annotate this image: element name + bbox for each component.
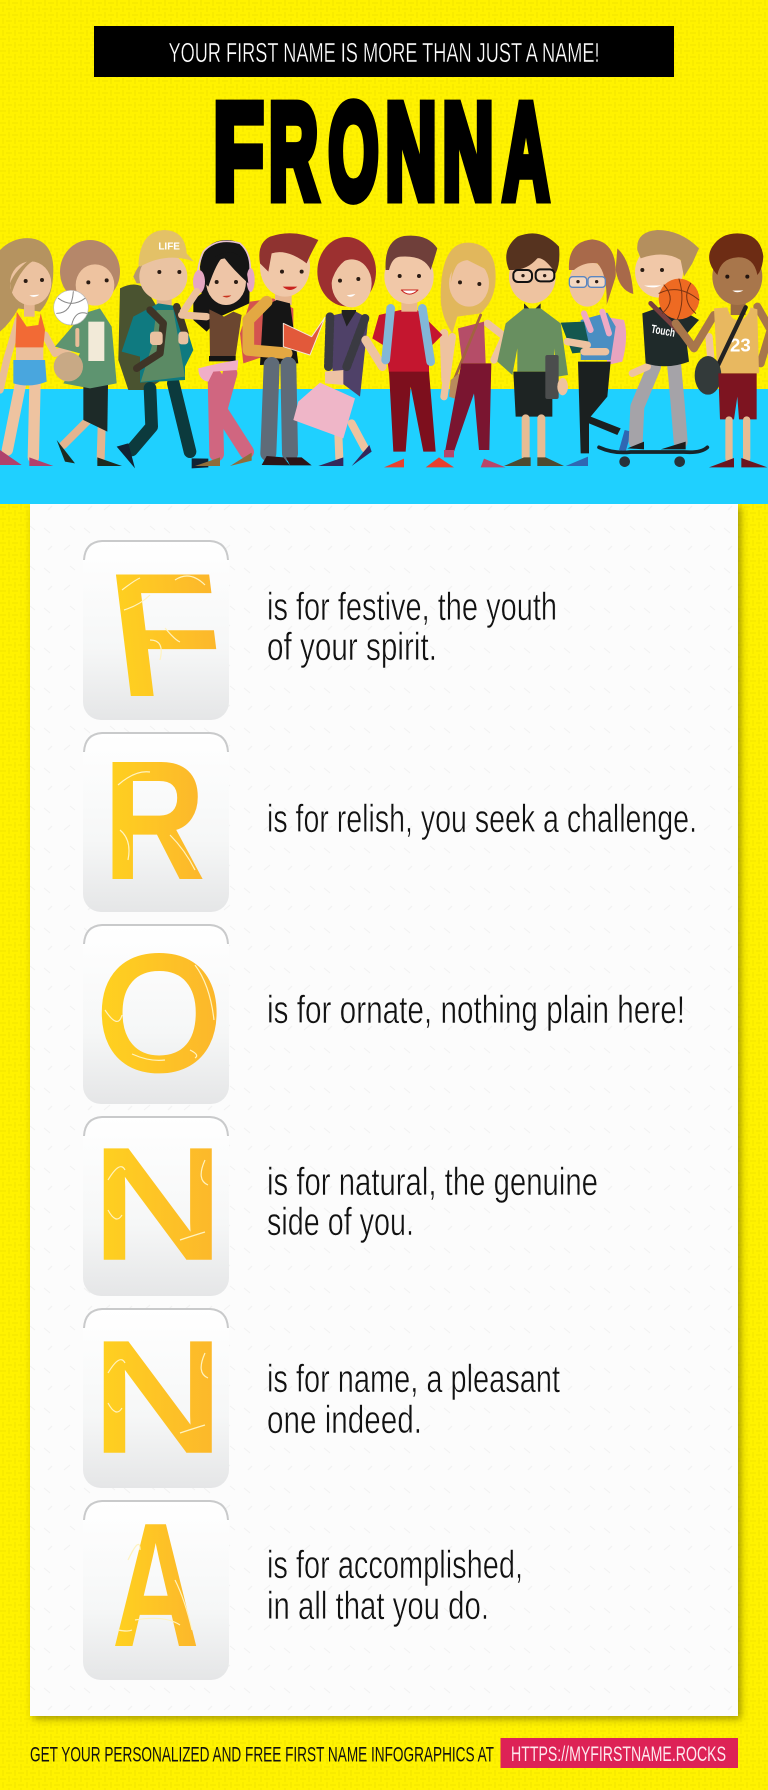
person: girl with volleyball <box>54 240 122 466</box>
person: boy with curly hair and tank top <box>676 233 768 467</box>
title: name: N <box>442 76 494 227</box>
text: A line: in all that you do. <box>267 1585 489 1628</box>
person: boy with cap and backpack <box>117 230 208 468</box>
person: girl with orange top <box>0 238 78 466</box>
tile: letter A <box>83 1487 229 1685</box>
illustration: group of young people <box>0 230 768 468</box>
footer: url badge <box>500 1738 738 1768</box>
tile: letter R: R <box>103 726 206 916</box>
person: girl with pink bag <box>293 237 376 466</box>
text: N second line: is for name, a pleasant <box>267 1358 560 1401</box>
tile: letter O: O <box>97 923 221 1104</box>
text: N second line <box>267 1358 560 1442</box>
person: boy on skateboard with basketball: Touch <box>650 322 676 340</box>
text: F line <box>267 586 557 669</box>
tile: letter F: F <box>100 541 232 729</box>
person: boy in red shirt with blue straps <box>366 236 454 467</box>
title: name: F <box>214 76 264 227</box>
text: F line: of your spirit. <box>267 626 437 669</box>
tile: letter A: A <box>112 1487 199 1685</box>
text: N line: side of you. <box>267 1201 414 1244</box>
text: N line: is for natural, the genuine <box>267 1161 598 1204</box>
title: name: O <box>328 76 378 227</box>
person: boy with curly hair and tank top: 23 <box>730 335 751 356</box>
person: girl with headphones <box>182 240 255 466</box>
footer: call to action: GET YOUR PERSONALIZED AND FREE FIRST NAME INFOGRAPHICS AT <box>30 1744 494 1766</box>
tile: letter N second: N <box>92 1310 223 1483</box>
person: blonde girl <box>441 243 506 467</box>
person: boy with cap and backpack: LIFE <box>158 241 180 252</box>
blue floor band <box>0 389 768 504</box>
title: name <box>214 76 549 227</box>
title: name: R <box>269 76 318 227</box>
person: boy with red book <box>240 233 325 465</box>
tile: letter N: N <box>92 1117 223 1290</box>
text: A line <box>267 1544 523 1628</box>
text: A line: is for accomplished, <box>267 1544 523 1587</box>
person: boy on skateboard with basketball <box>599 230 711 467</box>
title: name: N <box>386 76 436 227</box>
text: F line: is for festive, the youth <box>267 586 557 629</box>
text: N second line: one indeed. <box>267 1399 422 1442</box>
text: N line <box>267 1161 598 1244</box>
banner: tagline <box>94 26 674 77</box>
text: A <box>503 76 549 227</box>
person: girl with ponytail and tablet <box>561 239 633 466</box>
panel: white card <box>30 504 738 1716</box>
person: boy with black glasses and laptop <box>497 233 568 466</box>
